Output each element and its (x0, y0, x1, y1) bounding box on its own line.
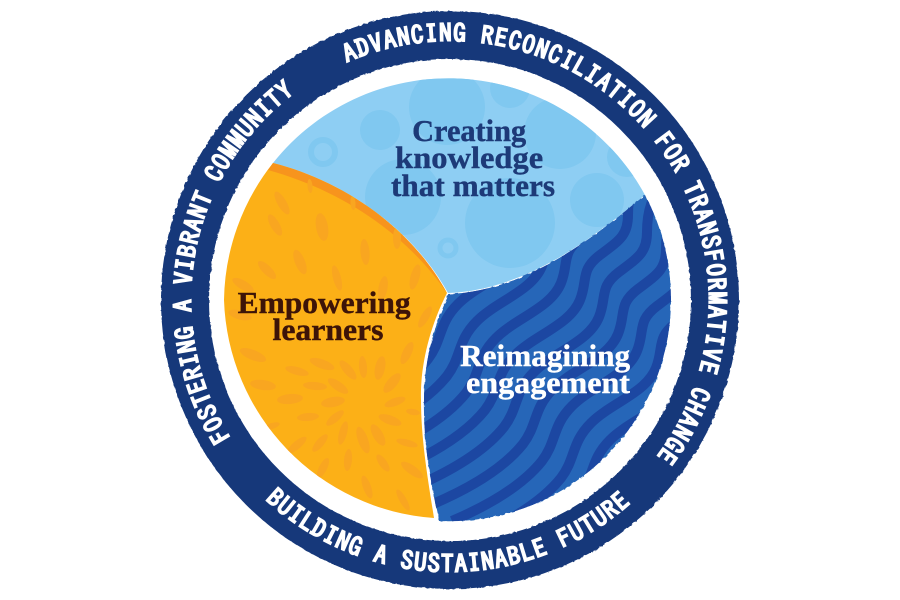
ring label: fostering a vibrant community: FOSTERING A VIBRANT COMMUNITY (172, 78, 292, 446)
orange top edge band (268, 163, 447, 293)
panel: empowering learners (orange sector) (224, 163, 447, 518)
panel: reimagining engagement (blue sector) (423, 195, 672, 522)
heading: empowering learners: Empowering (238, 285, 411, 320)
ring label: advancing reconciliation: ADVANCING RECONCILIATION FOR TRANSFORMATIVE CHANGE (344, 22, 728, 466)
heading: reimagining engagement: engagement (466, 365, 631, 400)
outer navy ring (185, 35, 715, 565)
panel: creating knowledge (light blue sector) (273, 68, 647, 293)
texture: wavy stripes (424, 200, 671, 522)
ring label: building a sustainable future: BUILDING A SUSTAINABLE FUTURE (265, 486, 631, 573)
circular framework diagram (160, 10, 740, 590)
heading: creating knowledge that matters: that matters (391, 168, 555, 203)
texture: soft circles (311, 68, 647, 268)
heading: empowering learners: learners (272, 312, 384, 347)
texture: radiating drops (227, 179, 434, 512)
heading: creating knowledge that matters: Creating (412, 113, 527, 148)
heading: creating knowledge that matters: knowledge (395, 140, 543, 175)
heading: reimagining engagement: Reimagining (460, 338, 631, 373)
